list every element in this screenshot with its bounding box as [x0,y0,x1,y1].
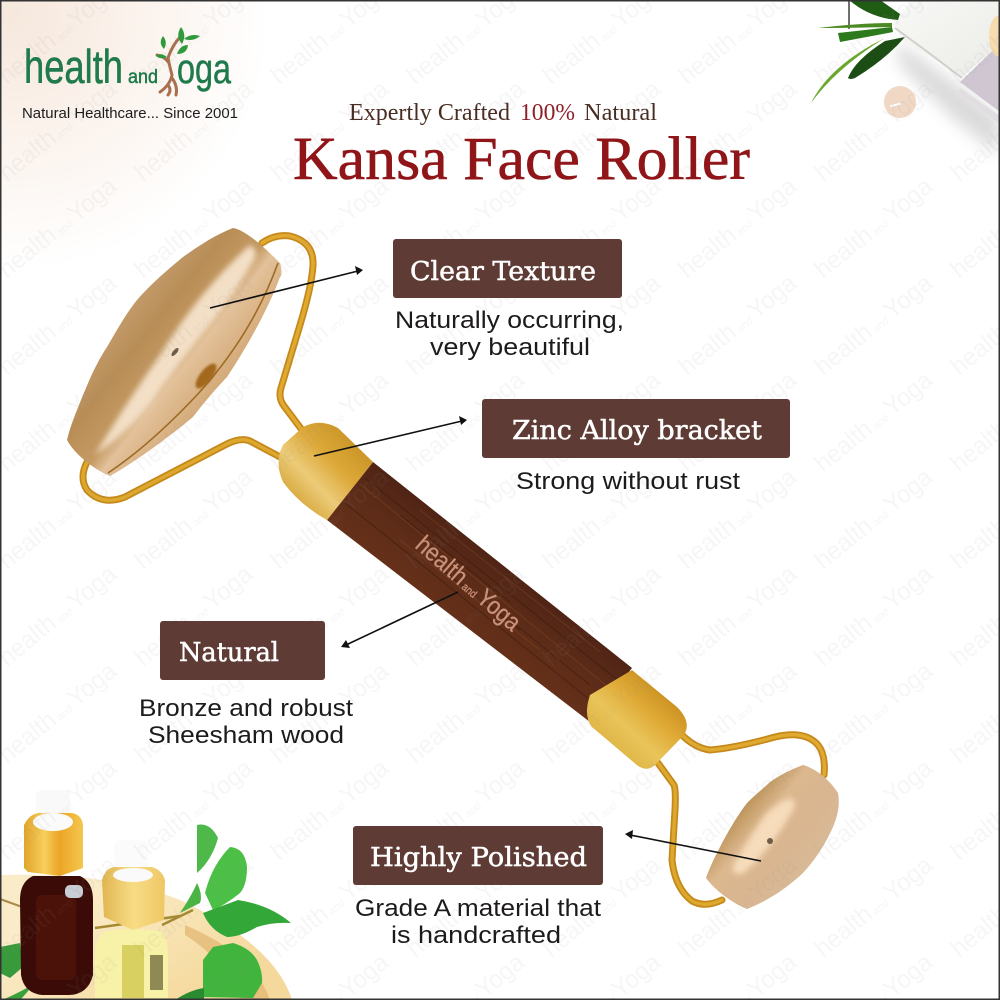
label text: Zinc Alloy bracket [512,416,763,446]
subtitle: Natural [584,100,657,126]
callout: natural [139,621,353,749]
description: Grade A material that [355,895,601,922]
icon: tree Y [156,27,200,95]
logo [22,27,238,122]
label text: Natural [179,638,279,668]
engraved logo on handle: health and Yoga [410,530,527,637]
icon: amber dropper bottle [20,790,93,995]
subtitle: 100% [520,100,575,126]
label box [482,399,790,458]
description: Strong without rust [516,468,740,495]
label box [353,826,603,885]
wooden handle [327,462,632,722]
tagline: Natural Healthcare... Since 2001 [22,106,238,122]
arrow: natural [341,592,458,648]
description [355,895,601,949]
description: Sheesham wood [148,722,344,749]
description: Bronze and robust [139,695,353,722]
upper wire bracket [83,236,313,500]
lower wire bracket [658,735,824,904]
decoration: towels, leaves and candle [811,0,1000,155]
description: Naturally occurring, [395,307,624,334]
description [395,307,624,361]
arrow: highly polished [625,830,761,861]
peach corner glow [0,0,300,300]
label box [393,239,622,298]
lower gold ferrule [587,670,687,769]
label box [160,621,325,680]
logo wordmark [24,40,231,93]
description [139,695,353,749]
title: Kansa Face Roller [293,126,750,193]
product: kansa face roller [67,228,839,909]
arrow: clear texture [210,266,363,308]
label text: Clear Texture [410,257,596,287]
logo wordmark: and [128,67,158,88]
upper gold ferrule [278,423,373,520]
arrow: zinc alloy bracket [314,416,467,456]
logo wordmark: oga [177,45,231,92]
subtitle [349,100,657,126]
description: is handcrafted [391,922,561,949]
icon: mint sprig [0,825,291,1000]
upper bronze roller head [67,228,282,476]
label text: Highly Polished [370,843,587,873]
callout: zinc alloy bracket [482,399,790,495]
logo wordmark: health [24,40,123,93]
icon: clear dropper bottle [95,840,168,998]
description: very beautiful [430,334,590,361]
callout: highly polished [353,826,603,949]
subtitle: Expertly Crafted [349,100,510,126]
callout: clear texture [393,239,624,361]
decoration: oil bottles and mint [0,790,292,1000]
lower bronze roller head [706,765,839,909]
